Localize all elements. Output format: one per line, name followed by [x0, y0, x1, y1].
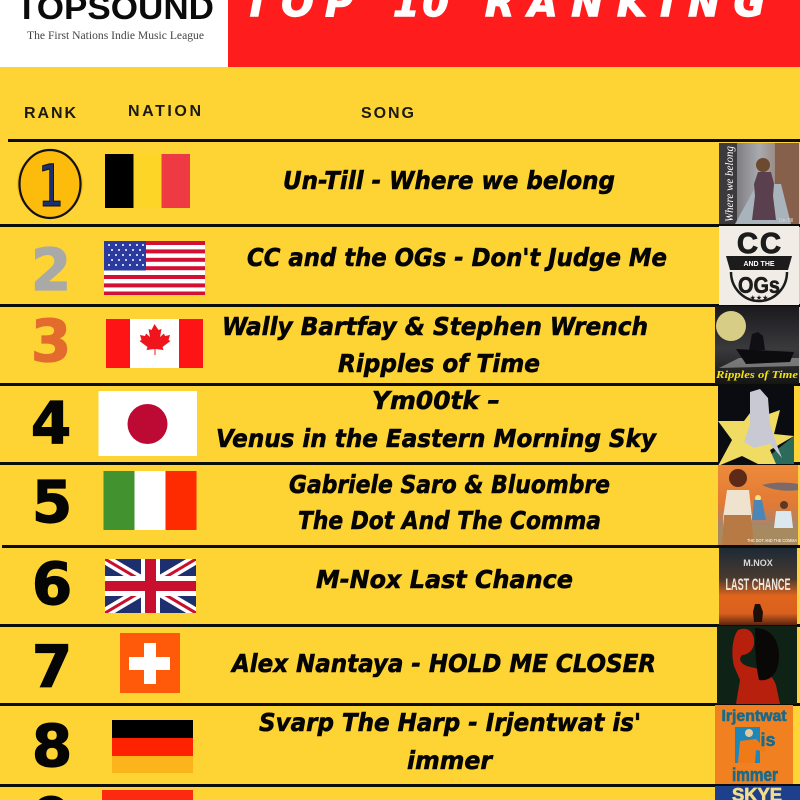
cover: The Dot And The Comma — [718, 465, 798, 545]
song 5: Gabriele Saro & Bluombre — [289, 470, 610, 499]
logo panel — [0, 0, 228, 67]
song 8: Svarp The Harp - Irjentwat is' — [259, 708, 641, 737]
cover: CC and the OGs: OGs — [738, 272, 780, 298]
cover: Ripples of Time: Ripples of Time — [715, 370, 799, 381]
song 7: Alex Nantaya - HOLD ME CLOSER — [230, 649, 656, 678]
flag: rank 9 — [102, 790, 193, 800]
cover: CC and the OGs: AND THE — [743, 261, 775, 268]
cover: Hold Me Closer — [717, 626, 797, 704]
cover: Ripples of Time — [715, 306, 799, 384]
rank 1 badge: 1 — [38, 152, 64, 220]
cover: Irjentwat is immer — [715, 705, 793, 785]
flag: Germany — [112, 720, 193, 773]
title — [244, 0, 765, 25]
cover: Irjentwat is immer: is — [760, 730, 776, 750]
song 3 — [222, 312, 648, 378]
rank 6: 6 — [32, 550, 72, 618]
song 6: M-Nox Last Chance — [316, 565, 573, 594]
rank 7: 7 — [32, 633, 72, 701]
flag: Belgium — [105, 154, 190, 208]
flag: Japan — [98, 391, 197, 456]
title banner — [228, 0, 800, 67]
cover: CC and the OGs: CC — [737, 228, 781, 260]
rank 3: 3 — [31, 307, 71, 375]
song 5 — [289, 470, 610, 535]
rank 5: 5 — [32, 468, 72, 536]
song 4: Venus in the Eastern Morning Sky — [216, 424, 658, 453]
flag: USA — [104, 241, 205, 295]
cover: Last Chance: M.NOX — [743, 558, 773, 568]
cover: CC and the OGs: ★★★ — [750, 294, 768, 302]
song 1: Un-Till - Where we belong — [283, 166, 615, 195]
cover: Skye — [715, 785, 800, 800]
song 4: Ym00tk – — [372, 386, 500, 415]
song 5: The Dot And The Comma — [298, 506, 601, 535]
cover: Venus in the Eastern Morning Sky — [718, 386, 794, 466]
column header: nation: NATION — [128, 103, 202, 120]
column header: song: SONG — [361, 105, 415, 122]
cover: Last Chance — [719, 548, 797, 625]
flag: Italy — [104, 471, 196, 530]
cover: Irjentwat is immer: immer — [732, 765, 778, 785]
flag: Canada — [106, 319, 203, 368]
cover: Where we belong — [719, 143, 799, 224]
cover: Where we belong: Where we belong — [722, 146, 736, 222]
song 8 — [259, 708, 641, 775]
cover: CC and the OGs — [719, 226, 799, 305]
cover: Irjentwat is immer: Irjentwat — [722, 708, 787, 725]
song 8: immer — [407, 746, 494, 775]
flag: Switzerland — [120, 633, 180, 693]
rank 8: 8 — [32, 712, 72, 780]
song 3: Wally Bartfay & Stephen Wrench — [222, 312, 648, 341]
column header: rank: RANK — [24, 105, 77, 122]
song 2: CC and the OGs - Don't Judge Me — [247, 243, 667, 272]
rank 4: 4 — [31, 389, 71, 457]
rank 2: 2 — [31, 236, 71, 304]
cover: Where we belong: Un-Till — [779, 218, 793, 224]
flag: United Kingdom — [105, 559, 196, 613]
song 3: Ripples of Time — [338, 349, 540, 378]
logo tagline: The First Nations Indie Music League — [27, 30, 204, 42]
rank 1 badge — [17, 150, 83, 220]
song 4 — [216, 386, 658, 453]
